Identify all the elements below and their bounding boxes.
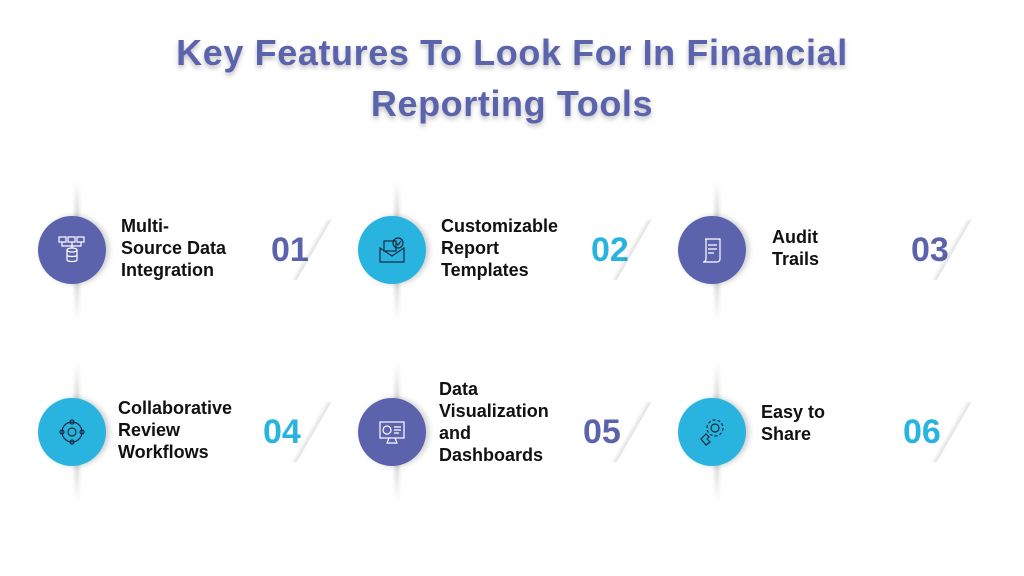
number 05: 05 <box>583 413 621 451</box>
icon circle 06 <box>678 398 746 466</box>
text 01: Integration <box>121 260 214 280</box>
text 05: Data <box>439 379 478 399</box>
text 02: Customizable <box>441 216 558 236</box>
icon circle 02 <box>358 216 426 284</box>
item 03 <box>678 188 972 312</box>
icon circle 04 <box>38 398 106 466</box>
text 04 <box>118 398 232 462</box>
text 02: Templates <box>441 260 529 280</box>
text 01: Source Data <box>121 238 226 258</box>
item 05 <box>358 370 652 494</box>
item 02 <box>358 188 652 312</box>
text 02: Report <box>441 238 499 258</box>
icon: data integration <box>58 236 85 262</box>
icon circle 03 <box>678 216 746 284</box>
text 05: Visualization <box>439 401 549 421</box>
text 02 <box>441 216 558 280</box>
text 06: Easy to <box>761 402 825 422</box>
text 01 <box>121 216 226 280</box>
text 01: Multi- <box>121 216 169 236</box>
text 05: Dashboards <box>439 445 543 465</box>
number 01: 01 <box>271 231 309 269</box>
number 03: 03 <box>911 231 949 269</box>
title: Key Features To Look For In Financial <box>176 32 848 73</box>
icon: dashboard monitor <box>379 421 405 444</box>
icon: gear hand <box>700 419 724 446</box>
text 04: Collaborative <box>118 398 232 418</box>
icon: scroll <box>703 238 721 263</box>
item 01 <box>38 188 332 312</box>
text 03: Trails <box>772 249 819 269</box>
icon: report envelope <box>379 237 405 263</box>
icon: collaboration <box>59 419 85 445</box>
number 06: 06 <box>903 413 941 451</box>
text 04: Review <box>118 420 180 440</box>
icon circle 05 <box>358 398 426 466</box>
text 03: Audit <box>772 227 818 247</box>
text 06: Share <box>761 424 811 444</box>
text 04: Workflows <box>118 442 209 462</box>
text 03 <box>772 227 819 269</box>
number 04: 04 <box>263 413 301 451</box>
text 05: and <box>439 423 471 443</box>
text 05 <box>439 379 549 465</box>
item 04 <box>38 370 332 494</box>
title: Reporting Tools <box>371 83 653 124</box>
icon circle 01 <box>38 216 106 284</box>
number 02: 02 <box>591 231 629 269</box>
title <box>176 32 848 129</box>
text 06 <box>761 402 825 444</box>
item 06 <box>678 370 972 494</box>
